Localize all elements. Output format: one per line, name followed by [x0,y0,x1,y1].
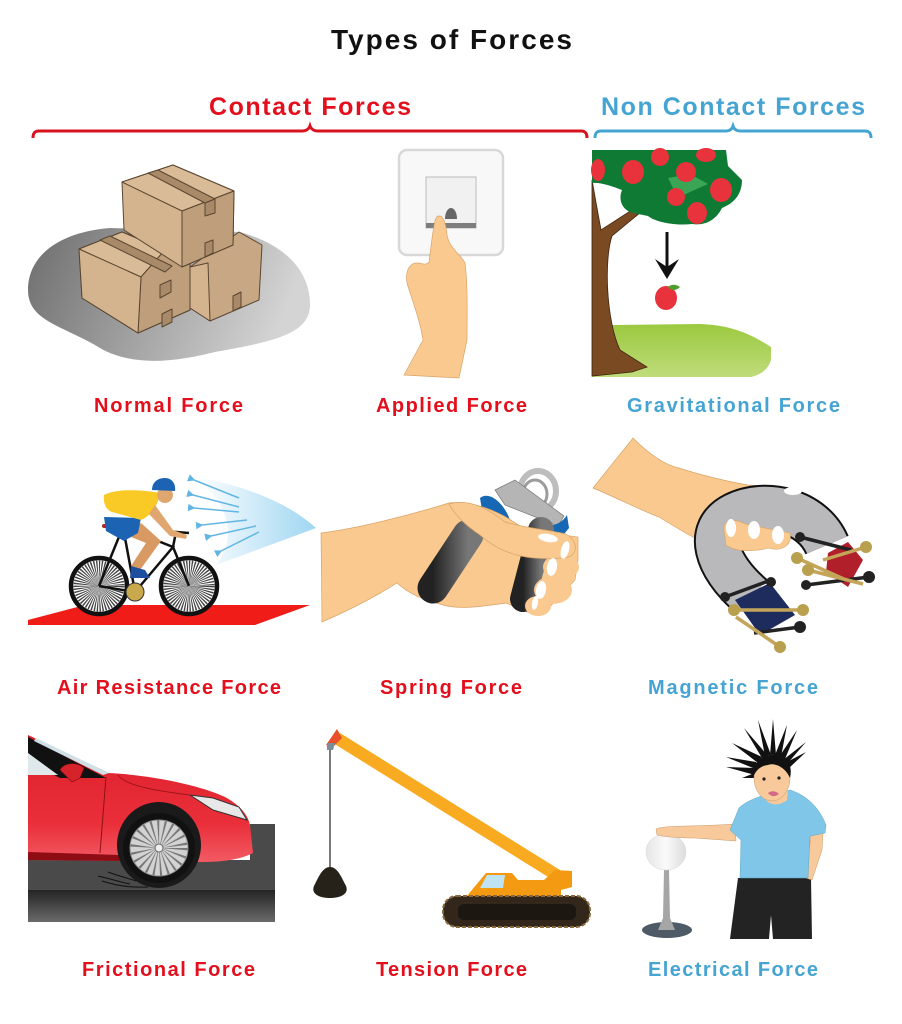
bicycle [71,524,217,614]
panel: frictional force [28,735,275,922]
silver spring [495,471,564,526]
label: tension force: Tension Force [376,959,527,981]
blue magnet pole with screws [720,577,809,653]
spiked hair [726,719,806,778]
panel: normal force [28,165,310,361]
panel: tension force [313,729,590,927]
heading: non contact forces [595,93,871,138]
cardboard boxes [79,165,262,333]
person t-shirt [730,790,826,878]
panel: magnetic force [593,438,875,653]
heading: contact forces: Contact Forces [209,93,411,121]
panel: gravitational force [591,148,771,377]
cyclist [104,478,187,578]
grass [592,324,771,377]
panel: electrical force [642,719,826,939]
thumb and fingers [449,502,579,616]
label: applied force: Applied Force [376,395,527,417]
crane cab [466,870,572,897]
road [28,824,275,922]
fingers under magnet [724,487,802,551]
person neck [765,790,788,804]
heading: contact forces [33,93,587,138]
label: electrical force: Electrical Force [648,959,818,981]
falling apple [655,285,680,310]
hand palm [321,502,578,622]
arrow: falling direction [655,232,679,279]
label: gravitational force: Gravitational Force [627,395,840,417]
car wheel [117,802,201,888]
heading: non contact forces: Non Contact Forces [601,93,865,121]
label: magnetic force: Magnetic Force [648,677,818,699]
crane boom [326,729,560,880]
panel: applied force [399,150,503,378]
label: frictional force: Frictional Force [82,959,255,981]
label: spring force: Spring Force [380,677,522,699]
panel: spring force [321,471,579,622]
hanging weight [313,867,347,898]
panel: air resistance force [28,477,316,625]
car body [28,735,253,862]
red ground [28,605,310,625]
wind arrows [193,480,259,551]
crane tracks [443,896,590,927]
blue caps [480,496,569,545]
tree trunk [592,180,647,376]
spring grips [433,530,541,599]
label: normal force: Normal Force [94,395,243,417]
title: Types of Forces [331,24,572,55]
wind fan [196,477,316,565]
tree foliage [592,150,742,225]
skid marks [98,872,148,887]
person arms [656,824,823,880]
hanging rope [329,748,331,868]
horseshoe magnet [717,508,827,597]
apples on tree [591,148,732,224]
globe stand [642,834,692,938]
doorbell switch [399,150,503,255]
pointing hand [404,216,467,378]
person head [754,755,791,801]
person pants [730,878,812,939]
surface shadow [28,228,310,361]
hand wrist [593,438,801,552]
label: air resistance force: Air Resistance Force [57,677,281,699]
red magnet pole with screws [791,532,875,590]
